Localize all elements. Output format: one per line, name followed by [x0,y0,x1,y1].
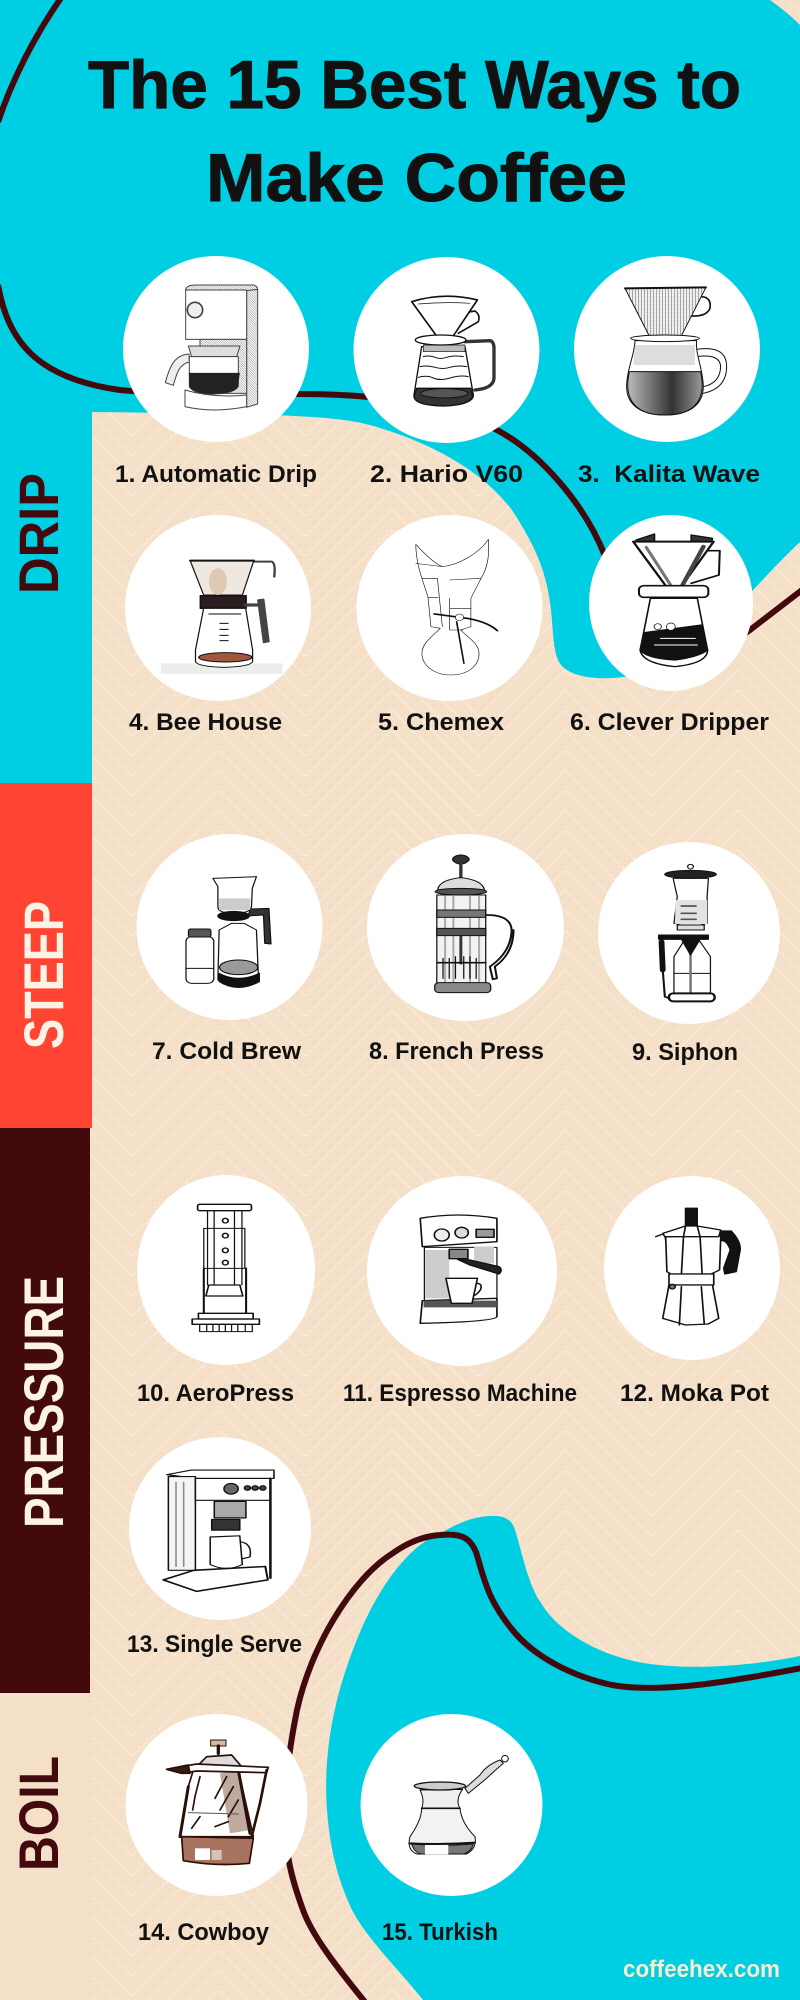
circle [123,256,309,442]
item: espresso machine [343,1176,577,1407]
label: 9. Siphon [632,1039,738,1066]
icon: siphon [659,864,716,1002]
label: 3. Kalita Wave [578,461,760,488]
label: 10. AeroPress [137,1380,294,1407]
icon: hario v60 [412,296,494,406]
item: kalita wave [574,256,760,488]
label: 4. Bee House [129,709,282,736]
label: 8. French Press [369,1038,544,1065]
icon: french press [435,855,514,993]
icon: cold brew [186,877,271,987]
circle [136,834,322,1020]
icon: cowboy pot [167,1740,268,1865]
label: 7. Cold Brew [152,1038,301,1065]
label: 11. Espresso Machine [343,1380,577,1407]
item: automatic drip [115,256,317,488]
label: 1. Automatic Drip [115,461,317,488]
heading: pressure: PRESSURE [12,1276,75,1528]
item: siphon [598,842,780,1066]
item: turkish [360,1714,542,1946]
footer: website: coffeehex.com [623,1956,780,1983]
label: 12. Moka Pot [620,1380,769,1407]
icon: aeropress [192,1204,259,1332]
heading: steep: STEEP [12,901,75,1049]
item: cowboy [126,1714,308,1946]
circle [367,1176,557,1366]
circle [367,834,564,1021]
icon: clever dripper [633,534,720,667]
item: single serve [127,1437,311,1658]
icon: espresso machine [420,1215,501,1323]
circle [354,257,540,443]
circle [356,515,542,701]
item: chemex [356,515,542,736]
circle [574,256,760,442]
item: bee house [125,515,311,736]
panel: pressure sidebar [0,1128,90,1693]
icon: bee house [161,561,282,674]
circle [126,1714,308,1896]
label: 13. Single Serve [127,1631,302,1658]
label: 2. Hario V60 [370,461,523,488]
item: clever dripper [570,515,769,736]
title [88,47,741,216]
icon: kalita wave [625,287,727,415]
circle [137,1175,315,1365]
heading: boil: BOIL [7,1756,70,1871]
item: aeropress [137,1175,315,1407]
item: hario v60 [354,257,540,488]
circle [360,1714,542,1896]
label: 14. Cowboy [138,1919,270,1946]
title: The 15 Best Ways to [88,47,741,123]
top cyan blob with drip sidebar [0,0,800,783]
heading: drip: DRIP [7,473,70,594]
circle [129,1437,311,1620]
circle [604,1176,780,1360]
circle [125,515,311,701]
label: 5. Chemex [378,709,505,736]
label: 15. Turkish [382,1919,498,1946]
icon: single serve [163,1470,274,1591]
bottom cyan blob [326,1516,800,2000]
circle [598,842,780,1024]
item: cold brew [136,834,322,1065]
panel: steep sidebar [0,783,92,1128]
item: moka pot [604,1176,780,1407]
icon: automatic drip machine [165,285,258,410]
circle [589,515,753,691]
icon: moka pot [656,1208,740,1325]
title: Make Coffee [206,140,627,216]
label: 6. Clever Dripper [570,709,769,736]
item: french press [367,834,564,1065]
icon: turkish cezve [409,1755,508,1854]
icon: chemex [416,539,497,675]
